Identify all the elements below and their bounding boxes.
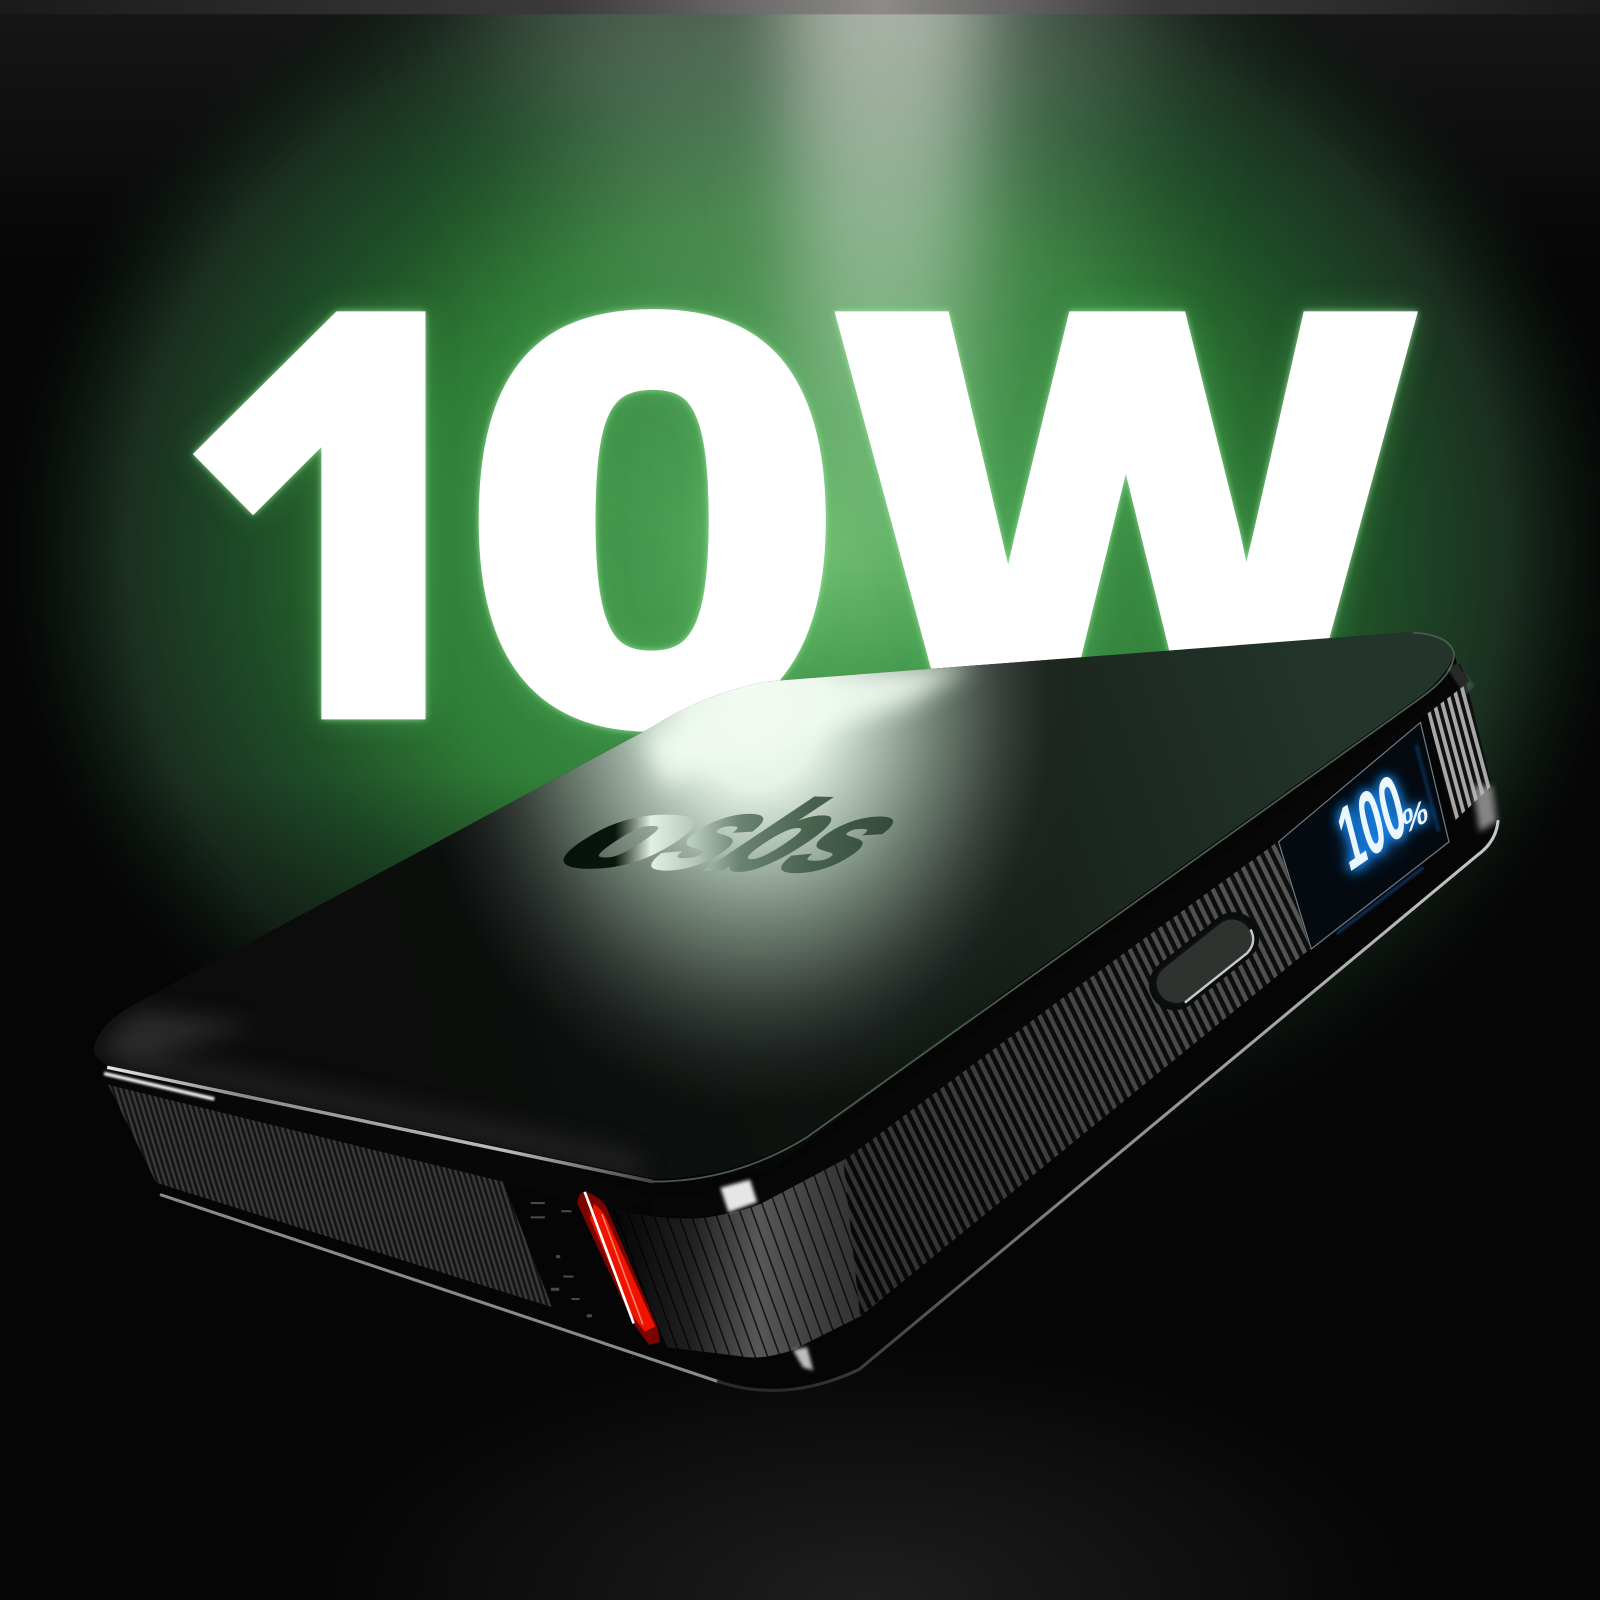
- long side ribs: [843, 842, 1310, 1316]
- side button: [1139, 902, 1269, 1021]
- lower rim line: [161, 821, 1498, 1390]
- metal specular highlights: [720, 663, 1497, 1370]
- top face edge highlights: [104, 633, 1454, 1182]
- port area: [503, 1182, 661, 1345]
- headline: 10W: 1: [163, 184, 526, 846]
- battery readout: %: [1401, 791, 1430, 842]
- light beam: [490, 0, 1143, 633]
- end ribs: [1427, 682, 1492, 821]
- top light strip: [0, 0, 1600, 14]
- corner ribs: [610, 1157, 880, 1358]
- left side fine-ribbed panel: [108, 1085, 552, 1307]
- logo: sbs: [608, 779, 962, 892]
- glossy rim bands: [108, 663, 1469, 1217]
- headline: 10W: 0: [463, 201, 842, 837]
- battery readout: 100: [1329, 754, 1414, 891]
- logo: [564, 796, 894, 874]
- battery readout: [1329, 754, 1430, 891]
- device body silhouette: [102, 653, 1498, 1391]
- headline: 10W: [188, 298, 1426, 737]
- red stripe: [578, 1192, 660, 1345]
- top face: [82, 612, 1469, 1194]
- headline: 10W: W: [852, 205, 1406, 824]
- display screen: [1279, 722, 1449, 949]
- logo: 0: [519, 802, 737, 883]
- power bank: [82, 612, 1498, 1391]
